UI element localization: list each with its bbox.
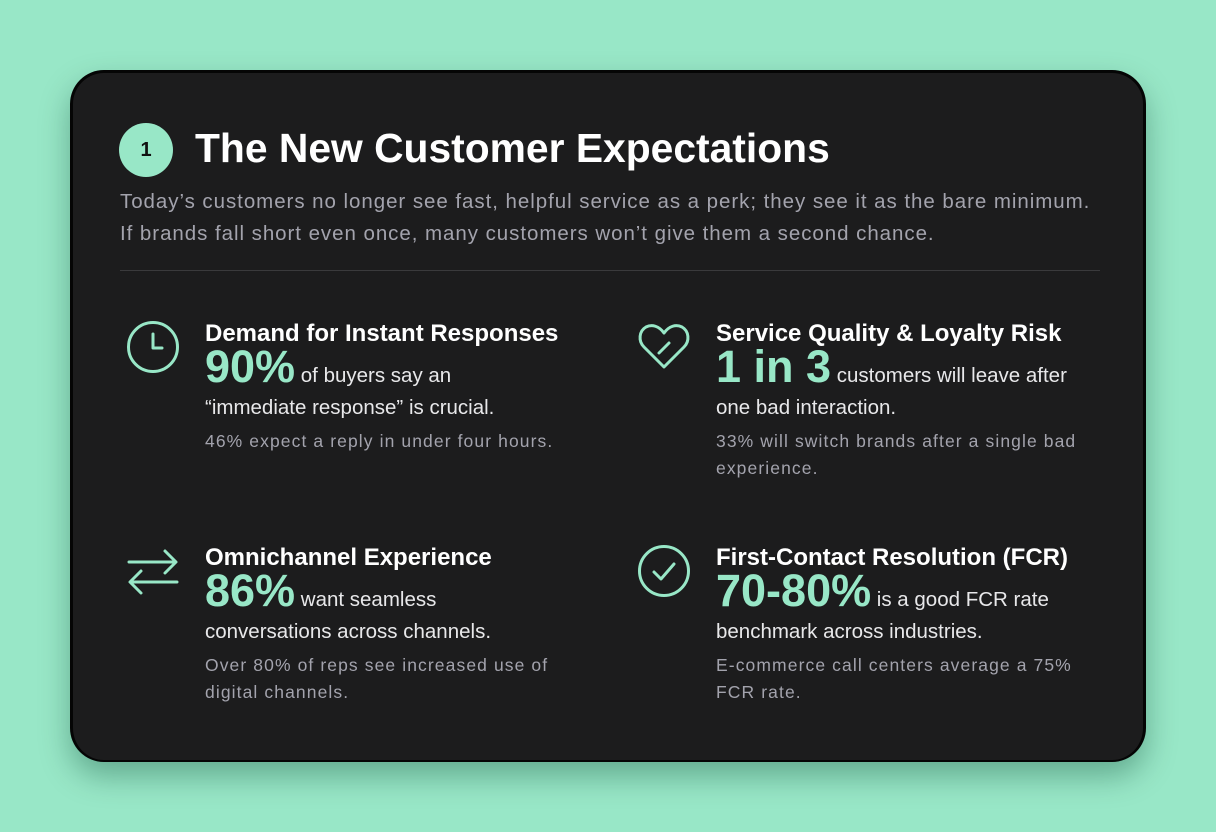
item: loyalty risk: 1 in 3 customers will leave after <box>716 341 1067 392</box>
card panel <box>70 70 1146 762</box>
item: omnichannel: 86% want seamless <box>205 565 436 616</box>
item: instant responses: 46% expect a reply in under four hours. <box>205 431 553 451</box>
item: instant responses: “immediate response” is crucial. <box>205 396 494 419</box>
item: omnichannel: Omnichannel Experience <box>205 544 492 571</box>
item: FCR: 70-80% is a good FCR rate <box>716 565 1049 616</box>
icon: heart <box>638 324 690 369</box>
item: loyalty risk: Service Quality & Loyalty Risk <box>716 320 1061 347</box>
item: loyalty risk <box>716 320 1076 478</box>
item: instant responses: Demand for Instant Responses <box>205 320 558 347</box>
item: FCR: FCR rate. <box>716 682 802 702</box>
item: loyalty risk: one bad interaction. <box>716 396 896 419</box>
subtitle: If brands fall short even once, many customers won’t give them a second chance. <box>120 222 935 245</box>
item: omnichannel <box>205 544 548 702</box>
item: loyalty risk: experience. <box>716 458 819 478</box>
item: omnichannel: Over 80% of reps see increased use of <box>205 655 548 675</box>
icon: clock <box>127 321 179 373</box>
title: The New Customer Expectations <box>195 125 830 171</box>
icon: check circle <box>638 545 690 597</box>
item: FCR: First-Contact Resolution (FCR) <box>716 544 1068 571</box>
item: omnichannel: conversations across channels. <box>205 620 491 643</box>
item: loyalty risk: 33% will switch brands after a single bad <box>716 431 1076 451</box>
item: omnichannel: digital channels. <box>205 682 349 702</box>
icon: arrows <box>128 549 178 595</box>
badge number: 1 <box>140 138 152 160</box>
item: FCR: E-commerce call centers average a 75% <box>716 655 1072 675</box>
item: FCR <box>716 544 1072 702</box>
subtitle: Today’s customers no longer see fast, helpful service as a perk; they see it as the bare minimum. <box>120 190 1090 213</box>
item: instant responses <box>205 320 558 451</box>
subtitle <box>120 190 1090 245</box>
item: instant responses: 90% of buyers say an <box>205 341 451 392</box>
item: FCR: benchmark across industries. <box>716 620 983 643</box>
badge number <box>119 123 173 177</box>
